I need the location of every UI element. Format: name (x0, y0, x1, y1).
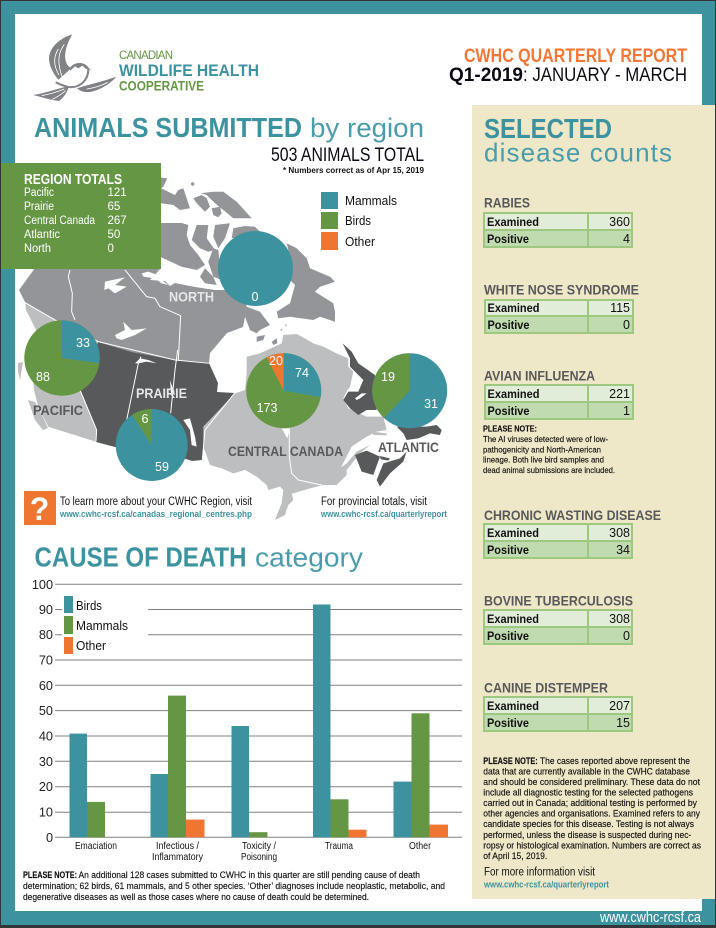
disease: white nose syndrome: 0 (623, 318, 630, 332)
disease: canine distemper: 15 (616, 716, 630, 730)
disease: bovine tuberculosis: BOVINE TUBERCULOSIS (484, 592, 633, 608)
disease: chronic wasting disease: 34 (616, 543, 630, 557)
map labels: NORTH (169, 288, 214, 304)
disease: chronic wasting disease: Positive (487, 543, 529, 557)
disease: canine distemper: CANINE DISTEMPER (484, 679, 608, 695)
map region: Prairie (80, 342, 235, 461)
disease: chronic wasting disease (483, 507, 661, 559)
map legend: Other (345, 235, 375, 249)
map labels: PACIFIC (33, 402, 83, 418)
disease: chronic wasting disease: Examined (487, 526, 539, 540)
panel: region totals: Prairie (24, 201, 54, 213)
disease: white nose syndrome: WHITE NOSE SYNDROME (484, 281, 639, 297)
heading: animals submitted by region: 503 ANIMALS TOTAL (271, 144, 424, 166)
note: preliminary data: candidate species for this disease. Testing is not always (483, 819, 694, 829)
logo wordmark: WILDLIFE HEALTH (119, 62, 259, 80)
y axis labels: 30 (39, 755, 53, 769)
category labels: Toxicity / (242, 841, 276, 852)
note: preliminary data: performed, unless the disease is suspected during nec- (483, 830, 691, 840)
category labels: Other (409, 841, 432, 852)
pie: North (218, 231, 293, 306)
disease: canine distemper: Examined (487, 699, 539, 713)
note: preliminary data: other agencies and organisations. Examined refers to any (483, 809, 700, 819)
panel heading: SELECTED (484, 113, 612, 144)
heading: animals submitted by region: ANIMALS SUBMITTED (34, 112, 302, 143)
category labels (75, 841, 432, 863)
panel: region totals: Pacific (24, 187, 54, 199)
pie: Pacific: 88 (36, 370, 50, 384)
report title (449, 46, 687, 86)
y axis labels: 100 (32, 578, 53, 592)
note: pending cases: PLEASE NOTE: (23, 870, 77, 880)
note: avian influenza: lineage. Both live bird samples and (483, 455, 604, 465)
heading: cause of death category: category (255, 543, 364, 573)
note: avian influenza (483, 424, 615, 475)
icon: bird (33, 34, 116, 101)
note: avian influenza: pathogenicity and North-American (483, 444, 601, 454)
category labels: Inflammatory (152, 852, 203, 863)
map region: Atlantic (343, 343, 442, 487)
disease: white nose syndrome: Examined (488, 301, 540, 315)
map legend: Mammals (345, 194, 397, 208)
panel: region totals: 267 (108, 215, 127, 227)
disease: white nose syndrome: Positive (488, 318, 530, 332)
disease: rabies: 360 (609, 215, 630, 229)
note: preliminary data: carried out in Canada; additional testing is performed by (483, 798, 697, 808)
pie: Prairie (116, 409, 188, 481)
disease: chronic wasting disease: CHRONIC WASTING DISEASE (484, 507, 661, 523)
regional link text: To learn more about your CWHC Region, visit (60, 496, 253, 508)
disease: avian influenza: 221 (609, 387, 630, 401)
chart legend: Birds (76, 599, 102, 613)
map labels: PRAIRIE (136, 385, 187, 401)
panel: region totals (1, 163, 161, 269)
note: avian influenza: PLEASE NOTE: (483, 424, 537, 434)
disease: rabies: Examined (487, 215, 539, 229)
bars: Toxicity / Poisoning (232, 726, 268, 837)
pie: Central Canada: 173 (257, 401, 277, 415)
note: preliminary data: ropsy or histological examination. Numbers are correct as (483, 840, 701, 850)
y axis labels: 20 (39, 780, 53, 794)
category labels: Poisoning (241, 852, 277, 863)
heading: cause of death category: CAUSE OF DEATH (34, 542, 246, 573)
note: preliminary data: and should be considered preliminary. These data do not (483, 777, 700, 787)
y axis labels: 10 (39, 806, 53, 820)
disease: bovine tuberculosis: Positive (487, 629, 529, 643)
more information link: For more information visit (484, 867, 596, 879)
note: preliminary data: include all diagnostic testing for the selected pathogens (483, 788, 693, 798)
bars: Emaciation (70, 734, 105, 837)
map labels: CENTRAL CANADA (228, 443, 343, 459)
report title: Q1-2019 (449, 65, 523, 86)
chart legend: Other (76, 639, 106, 653)
panel: region totals: 121 (108, 187, 127, 199)
icon: question mark (24, 491, 56, 527)
map region: Central Canada (203, 334, 387, 520)
chart axis and gridlines (55, 584, 462, 837)
panel: region totals: 0 (108, 243, 114, 255)
panel: selected disease counts (472, 105, 715, 899)
disease: canine distemper: 207 (609, 699, 630, 713)
logo wordmark (119, 50, 259, 94)
disease: avian influenza: Positive (488, 404, 530, 418)
disease: avian influenza (484, 368, 634, 420)
logo wordmark: COOPERATIVE (119, 78, 204, 94)
pie: Prairie: 6 (142, 412, 149, 426)
note: avian influenza: The AI viruses detected were of low- (483, 434, 608, 444)
y axis labels: 60 (39, 679, 53, 693)
heading: animals submitted by region: * Numbers correct as of Apr 15, 2019 (283, 165, 424, 175)
disease: rabies: 4 (623, 232, 630, 246)
map labels: ATLANTIC (378, 439, 439, 455)
note: pending cases (23, 870, 445, 902)
note: preliminary data (483, 756, 701, 861)
panel: region totals: 65 (108, 201, 120, 213)
chart legend (64, 596, 128, 654)
panel: region totals: North (24, 243, 51, 255)
more information link (483, 867, 610, 891)
report title: : JANUARY - MARCH (523, 65, 687, 86)
y axis labels: 0 (46, 831, 53, 845)
regional link text: www.cwhc-rcsf.ca/canadas_regional_centres.php (59, 509, 252, 520)
icon: question mark: ? (30, 491, 49, 527)
map legend: Birds (345, 214, 371, 228)
disease: rabies: RABIES (484, 194, 530, 210)
panel: region totals: Central Canada (24, 215, 96, 227)
note: pending cases: An additional 128 cases submitted to CWHC in this quarter are still pending cause of death (78, 870, 420, 880)
map region: Pacific (18, 302, 98, 442)
y axis labels (32, 578, 53, 845)
footer website: www.cwhc-rcsf.ca (599, 910, 702, 926)
disease: white nose syndrome (484, 281, 639, 334)
bars: Other (394, 713, 448, 837)
pie: North: 0 (252, 290, 259, 304)
heading: animals submitted by region (34, 112, 424, 175)
pie: Prairie: 59 (155, 460, 169, 474)
note: preliminary data: of April 15, 2019. (483, 851, 547, 861)
disease: canine distemper (483, 679, 633, 732)
pie: Atlantic (372, 353, 447, 428)
bars: Infectious / Inflammatory (150, 696, 204, 837)
map labels (33, 288, 439, 459)
category labels: Emaciation (75, 841, 117, 852)
panel: region totals: 50 (108, 229, 120, 241)
disease: bovine tuberculosis: Examined (487, 612, 539, 626)
note: preliminary data: The cases reported above represent the (540, 756, 690, 766)
panel: region totals: REGION TOTALS (24, 171, 122, 188)
disease: bovine tuberculosis: 0 (623, 629, 630, 643)
y axis labels: 80 (39, 628, 53, 642)
bar chart: cause of death (32, 578, 462, 863)
pie: Pacific (24, 320, 100, 396)
bars: Trauma (313, 604, 366, 837)
panel: region totals: Atlantic (24, 229, 60, 241)
heading: animals submitted by region: by region (310, 113, 424, 143)
pie: Atlantic: 19 (381, 370, 395, 384)
y axis labels: 40 (39, 730, 53, 744)
pie: Atlantic: 31 (424, 397, 438, 411)
panel heading: disease counts (484, 138, 672, 168)
footer website (599, 899, 715, 926)
disease: canine distemper: Positive (487, 716, 529, 730)
note: pending cases: degenerative diseases as well as those cases where no cause of death could be determined. (23, 892, 369, 902)
disease: white nose syndrome: 115 (610, 301, 630, 315)
regional link text (59, 496, 253, 520)
note: avian influenza: dead animal submissions are included. (483, 465, 615, 475)
y axis labels: 90 (39, 603, 53, 617)
category labels: Infectious / (156, 841, 199, 852)
pie: Central Canada: 20 (269, 354, 283, 368)
disease: avian influenza: Examined (488, 387, 540, 401)
disease: rabies: Positive (487, 232, 529, 246)
logo: Canadian Wildlife Health Cooperative (33, 34, 259, 101)
map details: lakes and borders (23, 270, 367, 485)
panel heading (484, 113, 672, 168)
note: preliminary data: data that are currently available in the CWHC database (483, 766, 690, 776)
provincial link text (320, 496, 448, 520)
disease: avian influenza: AVIAN INFLUENZA (484, 368, 595, 384)
map region: North (19, 177, 335, 363)
provincial link text: www.cwhc-rcsf.ca/quarterlyreport (320, 509, 448, 520)
disease: rabies (483, 194, 633, 248)
chart legend: Mammals (76, 619, 128, 633)
disease: bovine tuberculosis: 308 (609, 612, 630, 626)
note: pending cases: determination; 62 birds, 61 mammals, and 5 other species. ‘Other’ diagnoses include neoplastic, metabolic, and (23, 881, 445, 891)
map of Canada (18, 177, 442, 520)
y axis labels: 50 (39, 704, 53, 718)
provincial link text: For provincial totals, visit (321, 496, 428, 508)
disease: bovine tuberculosis (483, 592, 633, 645)
pie: Central Canada: 74 (295, 366, 309, 380)
map legend (321, 192, 397, 250)
logo wordmark: CANADIAN (119, 50, 173, 62)
disease: avian influenza: 1 (623, 404, 630, 418)
pie: Central Canada (246, 353, 321, 428)
pie: Pacific: 33 (76, 336, 90, 350)
y axis labels: 70 (39, 654, 53, 668)
more information link: www.cwhc-rcsf.ca/quarterlyreport (483, 880, 610, 891)
category labels: Trauma (325, 841, 353, 852)
disease: chronic wasting disease: 308 (609, 526, 630, 540)
note: preliminary data: PLEASE NOTE: (483, 756, 538, 766)
